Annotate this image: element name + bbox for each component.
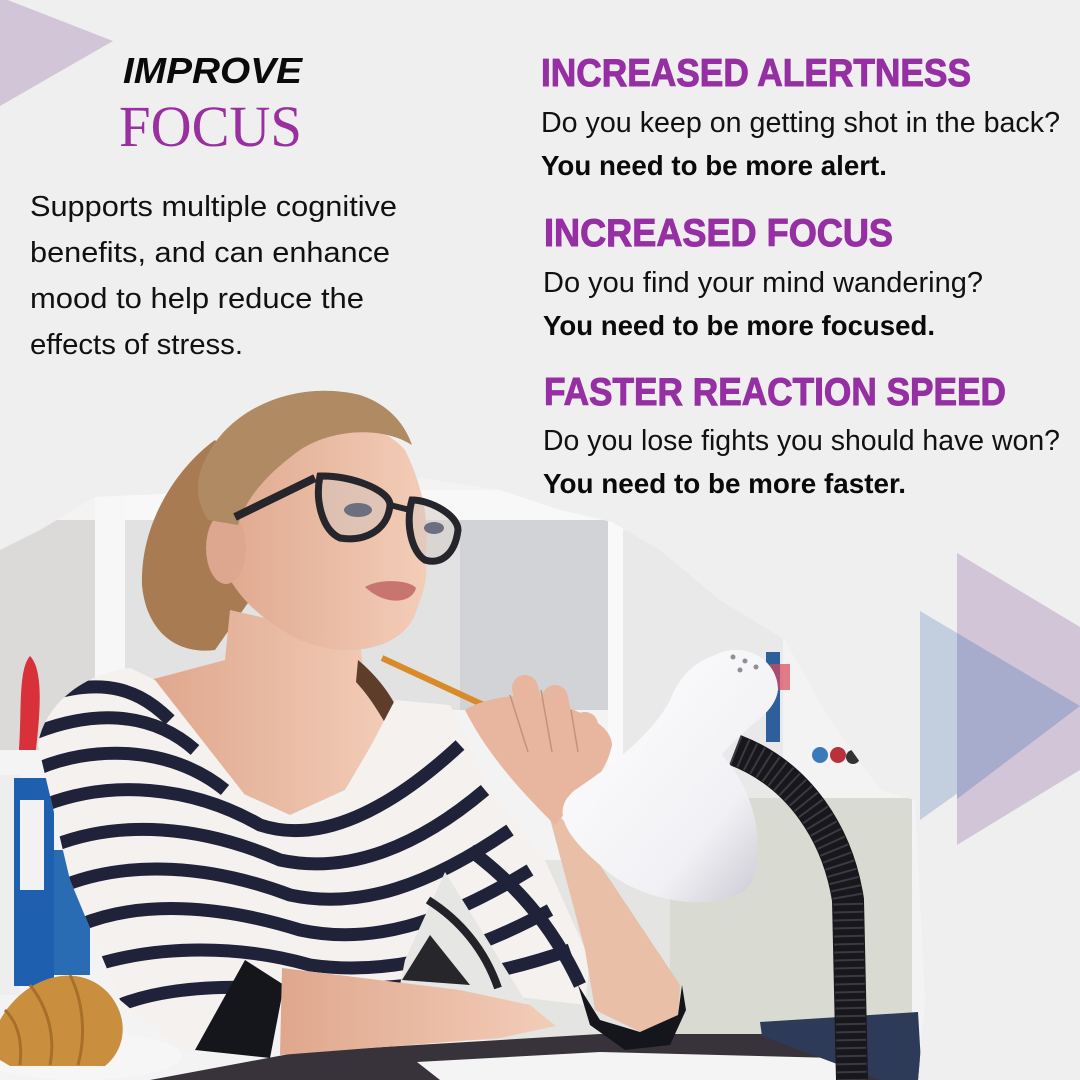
gap under the raised arm [400, 872, 528, 1005]
intro text: effects of stress. [30, 329, 243, 361]
benefit: faster reaction speed [543, 371, 1060, 499]
face [214, 419, 427, 650]
benefit: increased alertness: You need to be more alert. [541, 150, 887, 181]
striped shirt [38, 668, 588, 1008]
forearm on desk [280, 968, 556, 1055]
black cuff [195, 960, 284, 1058]
benefit: increased focus: You need to be more focused. [543, 310, 935, 341]
pencil [382, 658, 490, 708]
benefit: faster reaction speed: Do you lose fights you should have won? [543, 425, 1060, 457]
benefit: increased alertness: Do you keep on getting shot in the back? [541, 107, 1060, 139]
benefit: increased alertness [541, 52, 1060, 181]
ear [206, 512, 246, 584]
hair back and ponytail [142, 440, 250, 651]
hair top [198, 391, 412, 525]
office background [0, 470, 930, 1080]
benefit: faster reaction speed: FASTER REACTION SPEED [544, 371, 1006, 414]
title: FOCUS [119, 94, 302, 159]
lamp neck [735, 750, 852, 1080]
intro text: mood to help reduce the [30, 283, 364, 315]
lamp shade [563, 650, 778, 902]
benefit: increased alertness: INCREASED ALERTNESS [541, 52, 971, 95]
photo: woman thinking at a desk [0, 391, 930, 1080]
title: IMPROVE [123, 50, 303, 91]
triangles: right decoration [920, 553, 1080, 845]
intro text [30, 191, 397, 361]
intro text: benefits, and can enhance [30, 237, 390, 269]
benefit: increased focus [543, 212, 983, 341]
lips [365, 581, 416, 601]
benefit: increased focus: Do you find your mind wandering? [543, 267, 983, 299]
intro text: Supports multiple cognitive [30, 191, 397, 223]
glasses [235, 476, 458, 561]
hand [465, 688, 612, 825]
title [119, 50, 303, 159]
croissant and plate [0, 975, 182, 1080]
benefit: faster reaction speed: You need to be more faster. [543, 468, 906, 499]
raised forearm [545, 800, 680, 1032]
benefit: increased focus: INCREASED FOCUS [544, 212, 893, 255]
chair [402, 900, 498, 988]
right cuff [578, 985, 686, 1050]
triangle: top-left decoration [0, 0, 113, 106]
neck and chest [150, 610, 395, 815]
hair strand on neck [356, 660, 412, 755]
